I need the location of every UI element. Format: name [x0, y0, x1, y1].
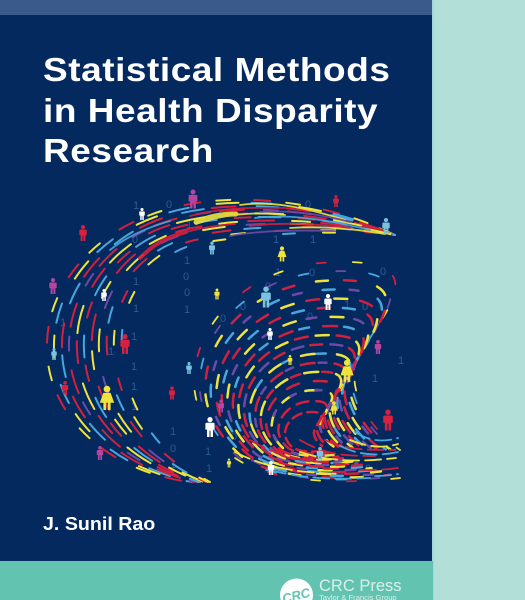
binary digits background: 0: [132, 234, 138, 246]
title: Statistical Methods: [43, 51, 390, 88]
icon: person: [79, 225, 87, 241]
binary digits background: 0: [309, 267, 315, 279]
illustration: data swirl with people: [46, 190, 404, 483]
icon: person: [214, 288, 220, 300]
icon: person: [100, 386, 114, 410]
icon: person: [383, 410, 393, 430]
icon: person: [139, 208, 145, 220]
binary digits background: 0: [362, 301, 368, 313]
binary digits background: 1: [206, 463, 212, 475]
author: J. Sunil Rao: [43, 514, 155, 534]
icon: person: [227, 458, 231, 468]
binary digits background: 1: [133, 303, 139, 315]
people figures: [49, 190, 393, 475]
binary digits background: 1: [273, 234, 279, 246]
publisher name: CRC Press: [319, 577, 402, 595]
binary digits background: 0: [365, 463, 371, 475]
binary digits background: 1: [186, 219, 192, 231]
title: Research: [43, 132, 214, 169]
icon: person: [340, 360, 354, 382]
binary digits background: 0: [220, 313, 226, 325]
binary digits background: 1: [131, 331, 137, 343]
icon: person: [382, 218, 390, 234]
icon: person: [330, 401, 338, 414]
icon: person: [278, 246, 286, 262]
title: in Health Disparity: [43, 92, 378, 129]
icon: person: [324, 294, 332, 310]
binary digits background: 0: [183, 271, 189, 283]
binary digits background: 1: [184, 255, 190, 267]
icon: person: [51, 348, 57, 360]
icon: person: [62, 381, 68, 395]
binary digits background: 1: [275, 267, 281, 279]
icon: person: [120, 334, 130, 354]
icon: person: [268, 461, 274, 475]
binary digits background: 1: [344, 299, 350, 311]
binary digits background: 1: [131, 381, 137, 393]
bottom right fan of strokes: [235, 432, 398, 479]
binary digits background: 1: [310, 234, 316, 246]
icon: person: [101, 289, 107, 301]
binary digits background: 1: [131, 401, 137, 413]
icon: person: [375, 340, 381, 354]
binary digits background: 1: [170, 459, 176, 471]
binary digits background: [60, 199, 404, 481]
binary digits background: 0: [240, 301, 246, 313]
outer arc of coloured strokes: [47, 200, 395, 482]
icon: person: [261, 286, 271, 308]
icon: person: [49, 278, 57, 294]
binary digits background: 1: [131, 361, 137, 373]
title: [43, 51, 390, 169]
binary digits background: 1: [184, 304, 190, 316]
icon: person: [97, 446, 103, 460]
binary digits background: 0: [265, 281, 271, 293]
binary digits background: 1: [133, 276, 139, 288]
icon: person: [218, 400, 224, 412]
icon: person: [209, 242, 215, 254]
icon: person: [267, 328, 273, 340]
top stripe: [0, 0, 433, 15]
binary digits background: 1: [108, 346, 114, 358]
binary digits background: 0: [380, 266, 386, 278]
icon: person: [169, 386, 175, 400]
binary digits background: 1: [398, 355, 404, 367]
binary digits background: 0: [305, 199, 311, 211]
cover edge highlight: [432, 0, 434, 600]
icon: person: [186, 362, 192, 374]
inner spiral of coloured strokes: [194, 262, 400, 481]
binary digits background: 0: [337, 469, 343, 481]
binary digits background: 1: [205, 446, 211, 458]
binary digits background: 0: [231, 431, 237, 443]
icon: person: [205, 417, 215, 437]
binary digits background: 1: [372, 373, 378, 385]
bottom teal band: [0, 561, 433, 600]
icon: person: [288, 355, 292, 365]
binary digits background: 0: [166, 199, 172, 211]
binary digits background: 0: [307, 311, 313, 323]
icon: person: [317, 447, 323, 461]
binary digits background: 0: [184, 287, 190, 299]
icon: person: [333, 195, 339, 207]
binary digits background: 1: [170, 426, 176, 438]
binary digits background: 1: [133, 200, 139, 212]
icon: person: [189, 190, 197, 208]
dense top band of the arc: [110, 204, 385, 258]
binary digits background: 0: [170, 443, 176, 455]
binary digits background: 1: [60, 317, 66, 329]
